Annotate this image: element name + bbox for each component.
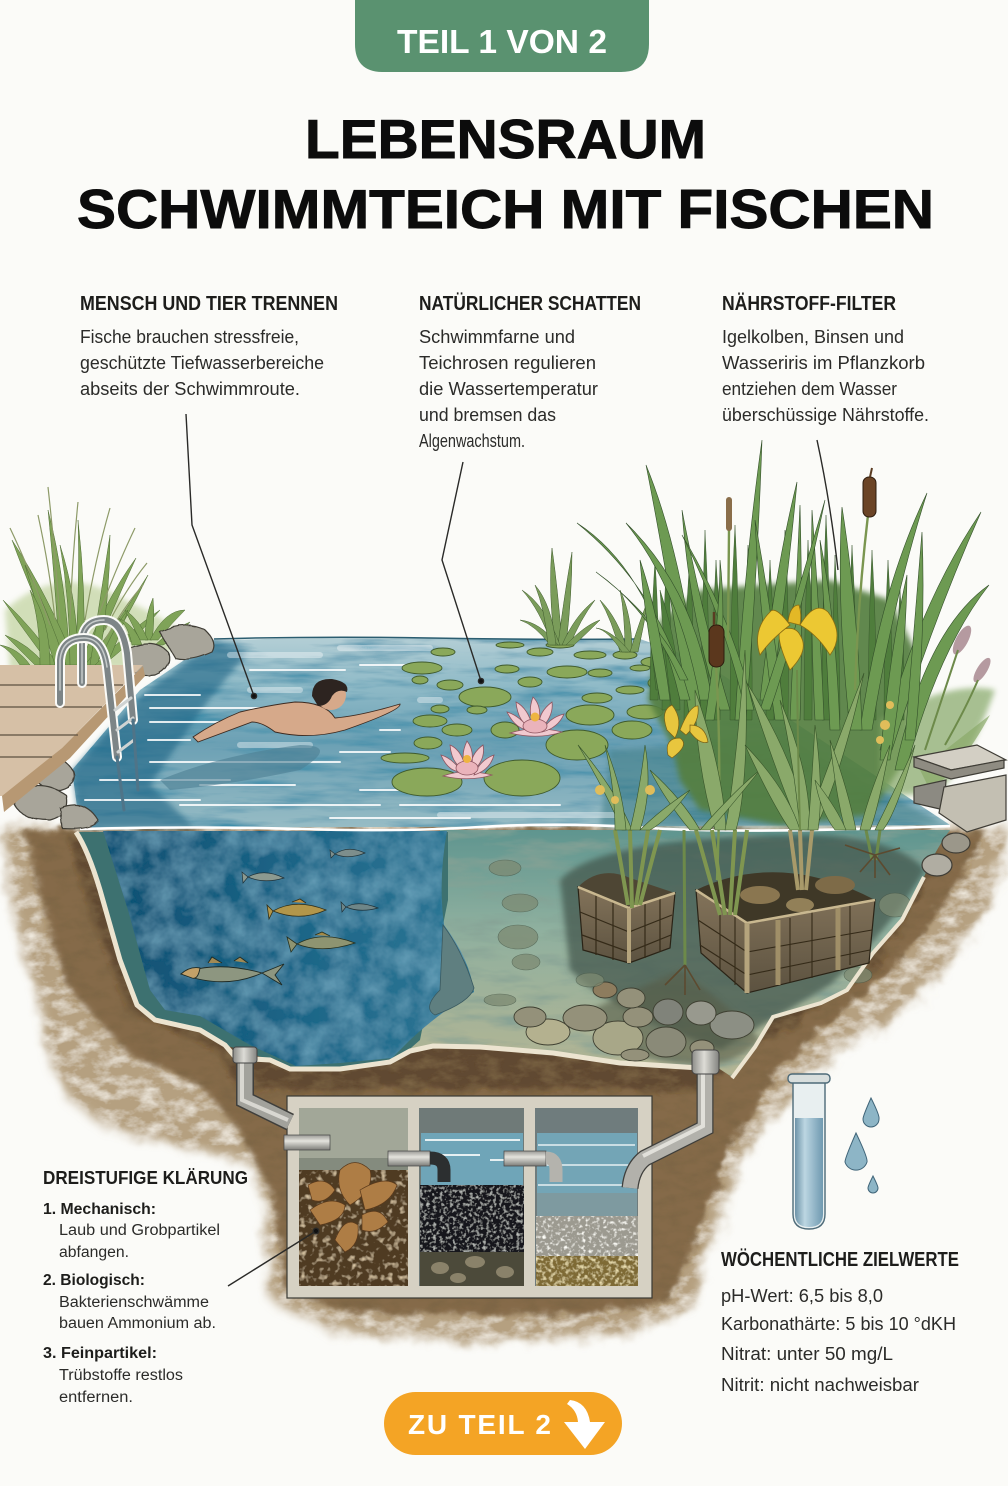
icon: test tube	[788, 1074, 830, 1229]
fish: golden	[267, 899, 326, 919]
fish: right small	[341, 902, 378, 912]
cattail middle	[709, 612, 724, 667]
right pond rim	[732, 877, 924, 1078]
text block: Wöchentliche Zielwerte: WÖCHENTLICHE ZIELWERTE	[721, 1248, 959, 1271]
text block: Nährstoff-Filter	[722, 292, 929, 425]
iris big flower	[758, 605, 837, 670]
left plants	[0, 487, 190, 670]
text block: Wöchentliche Zielwerte	[721, 1248, 959, 1395]
text block: Mensch und Tier trennen: geschützte Tiefwasserbereiche	[80, 353, 324, 373]
text block: Dreistufige Klärung	[43, 1168, 248, 1406]
underwater shallow zone	[400, 830, 950, 1077]
water lilies	[381, 642, 698, 796]
title	[77, 108, 934, 240]
illustration: pond cross-section	[0, 440, 1008, 1342]
lily flower back	[507, 697, 564, 736]
fish: small	[242, 872, 284, 883]
pebbles	[514, 982, 754, 1061]
lily pads	[381, 642, 698, 796]
iris small flower	[664, 705, 708, 758]
text block: Mensch und Tier trennen	[80, 293, 338, 399]
compartment 2: black gravel	[419, 1108, 524, 1286]
iris plants and front leaves	[578, 605, 994, 995]
text block: Natürlicher Schatten: und bremsen das	[419, 405, 556, 425]
soil around the pond	[4, 828, 1008, 1342]
text block: Wöchentliche Zielwerte: Karbonathärte: 5 bis 10 °dKH	[721, 1314, 956, 1334]
text block: Natürlicher Schatten: Schwimmfarne und	[419, 327, 575, 347]
text block: Nährstoff-Filter: überschüssige Nährstoffe.	[722, 405, 929, 425]
connector pipe 1	[388, 1151, 444, 1182]
underwater deep zone	[78, 831, 474, 1070]
text block: Natürlicher Schatten: die Wassertemperatur	[419, 379, 598, 399]
small basket	[578, 873, 675, 963]
text block: Wöchentliche Zielwerte: Nitrit: nicht nachweisbar	[721, 1375, 919, 1395]
fish: largest	[181, 957, 284, 985]
fish group	[181, 849, 378, 985]
text block: Mensch und Tier trennen: abseits der Schwimmroute.	[80, 379, 300, 399]
button: Zu Teil 2: ZU TEIL 2	[408, 1409, 551, 1440]
title: SCHWIMMTEICH MIT FISCHEN	[77, 178, 934, 240]
dense reed mass	[577, 440, 995, 880]
lavender spikes	[949, 623, 994, 685]
front leaves	[578, 650, 915, 830]
liner band	[78, 832, 448, 1070]
back rushes	[520, 548, 648, 652]
plant baskets	[578, 872, 875, 993]
text block: Dreistufige Klärung: 2. Biologisch:	[43, 1272, 145, 1289]
text block: Dreistufige Klärung: Trübstoffe restlos	[59, 1367, 183, 1384]
text block: Mensch und Tier trennen: Fische brauchen stressfreie,	[80, 327, 299, 347]
text block: Mensch und Tier trennen: MENSCH UND TIER TRENNEN	[80, 293, 338, 315]
text block: Dreistufige Klärung: bauen Ammonium ab.	[59, 1315, 216, 1332]
outlet pipe right	[630, 1050, 719, 1188]
marsh flowers	[595, 701, 894, 804]
icon: water drops	[845, 1098, 879, 1193]
header tab: Teil 1 von 2: TEIL 1 VON 2	[397, 23, 607, 60]
text block: Nährstoff-Filter: NÄHRSTOFF-FILTER	[722, 292, 896, 315]
text block: Dreistufige Klärung: 1. Mechanisch:	[43, 1201, 156, 1218]
text block: Nährstoff-Filter: Igelkolben, Binsen und	[722, 327, 904, 347]
text block: Dreistufige Klärung: 3. Feinpartikel:	[43, 1345, 157, 1362]
callout line: lilies	[442, 462, 484, 684]
text block: Dreistufige Klärung: Laub und Grobpartikel	[59, 1222, 220, 1239]
text block: Dreistufige Klärung: DREISTUFIGE KLÄRUNG	[43, 1168, 248, 1188]
connector pipe 2	[504, 1151, 556, 1182]
water line	[80, 825, 950, 831]
compartment 1: leaves	[299, 1108, 408, 1286]
pool ladder	[60, 620, 138, 810]
text block: Natürlicher Schatten: Algenwachstum.	[419, 431, 525, 451]
callout line: filter chamber	[228, 1228, 319, 1286]
text block: Natürlicher Schatten: Teichrosen regulieren	[419, 353, 596, 373]
text block: Wöchentliche Zielwerte: pH-Wert: 6,5 bis 8,0	[721, 1286, 883, 1306]
lily flower front	[441, 741, 494, 779]
roots	[665, 845, 900, 995]
pond liner edge	[76, 832, 700, 1069]
filter chamber	[233, 1047, 719, 1298]
cattail thin back	[726, 497, 732, 531]
text block: Nährstoff-Filter: entziehen dem Wasser	[722, 379, 897, 399]
far water surface	[72, 637, 950, 828]
text block: Dreistufige Klärung: entfernen.	[59, 1389, 133, 1406]
button: Zu Teil 2	[384, 1392, 622, 1455]
inlet pipe left	[233, 1047, 330, 1150]
cattail stems	[716, 515, 868, 880]
icon: curved arrow	[564, 1400, 605, 1449]
cattail upper right	[863, 468, 876, 517]
large basket	[696, 872, 875, 993]
text block: Natürlicher Schatten: NATÜRLICHER SCHATTEN	[419, 292, 641, 315]
wooden dock	[0, 665, 145, 812]
text block: Dreistufige Klärung: abfangen.	[59, 1244, 129, 1261]
compartment 3: fine gravel	[535, 1108, 638, 1286]
swimmer	[160, 679, 400, 790]
dark substrate under plants	[560, 835, 925, 1050]
fish: small far	[330, 849, 365, 858]
title: LEBENSRAUM	[305, 108, 706, 170]
text block: Natürlicher Schatten	[419, 292, 641, 451]
chamber frame	[287, 1096, 652, 1298]
header tab: Teil 1 von 2	[355, 0, 649, 72]
reed thin blades	[645, 515, 904, 720]
water ripples	[85, 648, 620, 818]
stones on rim	[942, 833, 970, 853]
grass seed stems	[10, 487, 147, 640]
fish: middle	[287, 932, 355, 952]
iris stem	[797, 670, 800, 830]
text block: Nährstoff-Filter: Wasseriris im Pflanzkorb	[722, 353, 925, 373]
rocks on the left	[15, 625, 214, 828]
text block: Dreistufige Klärung: Bakterienschwämme	[59, 1294, 209, 1311]
shelf rock	[430, 925, 474, 1015]
callout line: swimmer	[186, 414, 257, 699]
text block: Wöchentliche Zielwerte: Nitrat: unter 50 mg/L	[721, 1344, 893, 1364]
callout line: filter plants	[817, 440, 838, 570]
underwater stems	[615, 830, 880, 965]
reed blades back	[577, 440, 989, 770]
stone slabs right	[914, 745, 1006, 876]
